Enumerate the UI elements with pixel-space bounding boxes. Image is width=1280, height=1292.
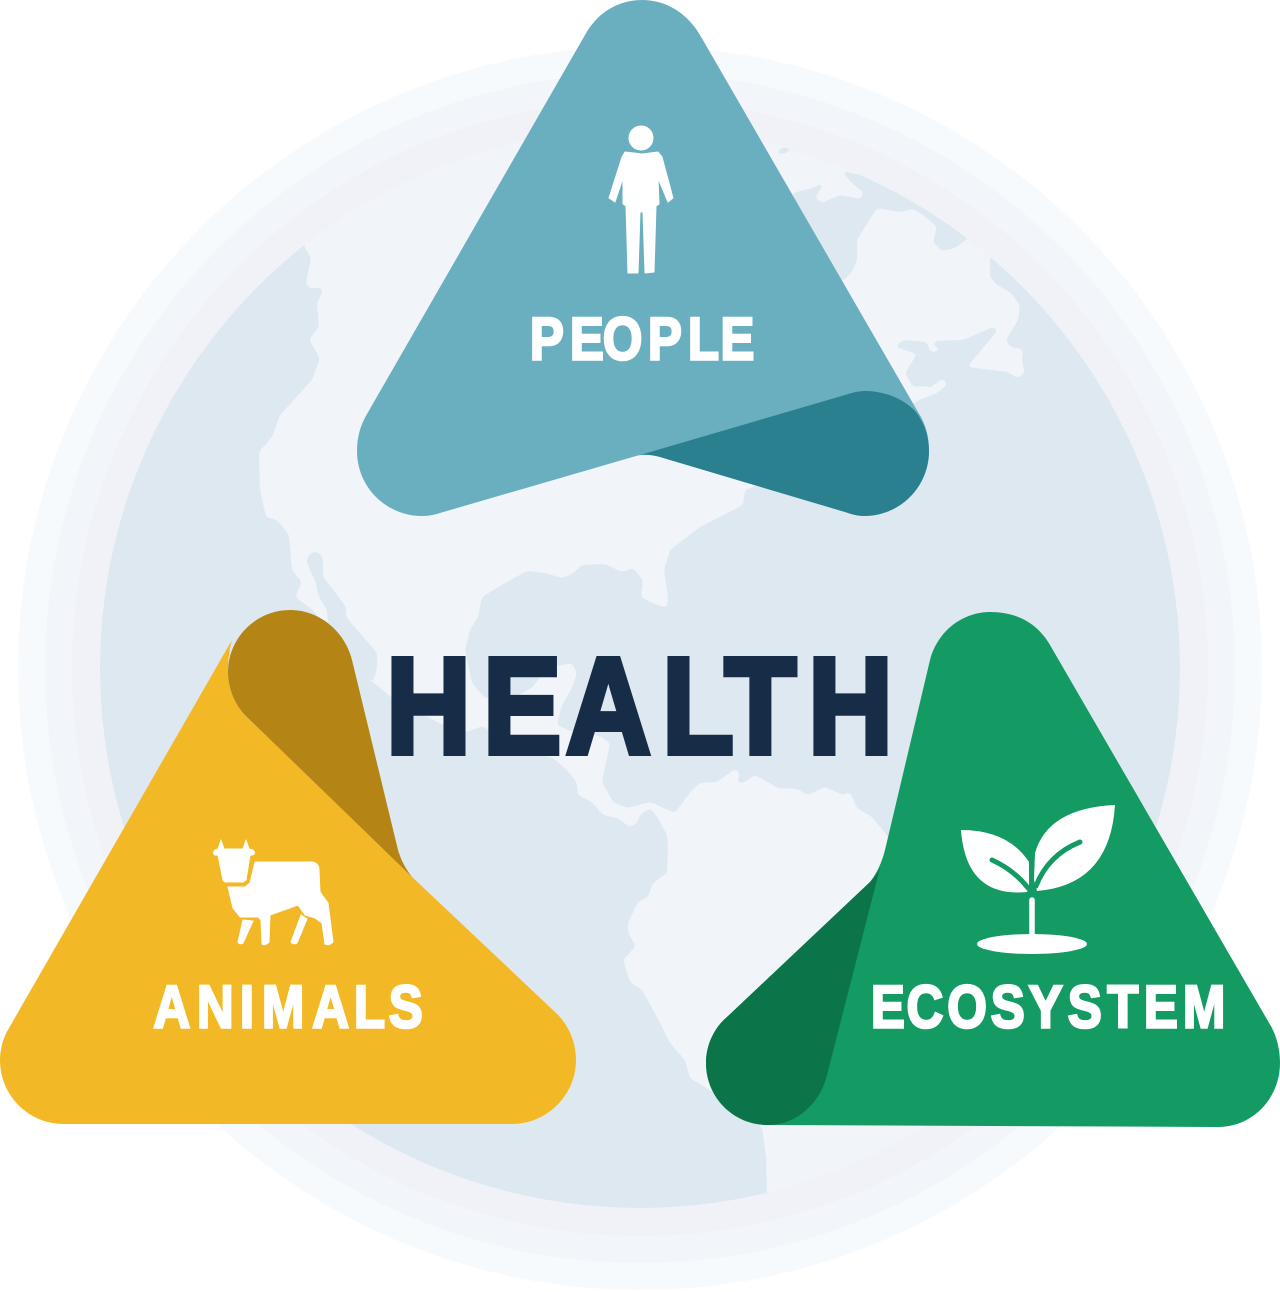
world map: the Americas [100,148,1180,1208]
people triangle body [357,0,929,516]
panel: people triangle [357,0,929,516]
animals label: ANIMALS [153,974,423,1041]
ecosystem label: ECOSYSTEM [871,974,1225,1041]
animals fold shadow [228,610,412,877]
people label: PEOPLE [530,306,754,373]
panel: ecosystem triangle [706,612,1280,1127]
ecosystem fold shadow [706,868,880,1125]
people fold shadow [640,391,929,516]
panel: animals triangle [0,610,576,1124]
icon: cow [214,840,333,945]
title: HEALTH: HEALTH [386,630,893,782]
ecosystem triangle body [706,612,1280,1127]
icon: plant seedling [961,805,1115,954]
animals triangle body [0,640,576,1124]
icon: person [609,126,673,273]
